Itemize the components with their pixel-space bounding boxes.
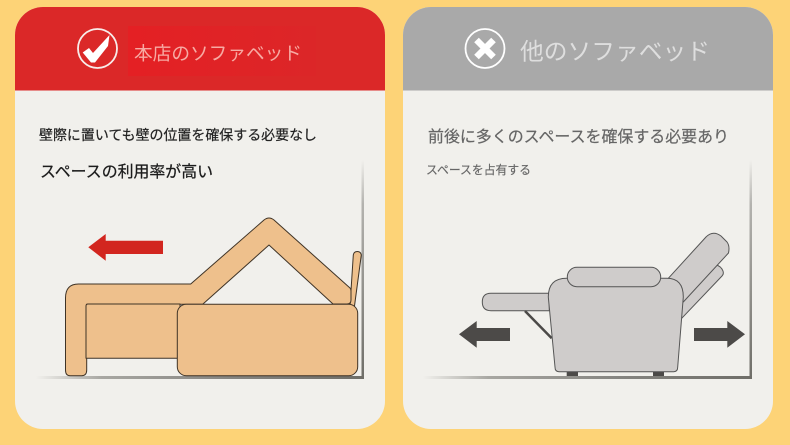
panel body	[15, 7, 385, 429]
heading: 本店のソファベッド	[134, 43, 302, 64]
under cushion	[86, 304, 180, 358]
illustration: sofa bed	[66, 218, 361, 376]
arm rest	[567, 267, 661, 287]
text: needs space front and back: 前後に多くのスペースを確保する必要あり	[428, 128, 729, 146]
body	[548, 278, 683, 372]
folding frame	[66, 218, 351, 376]
thin back rest	[350, 252, 361, 306]
left arrow	[459, 321, 510, 348]
icon: cross mark	[466, 29, 504, 68]
right arrow	[694, 321, 745, 348]
seat cushion	[177, 304, 358, 376]
wall and floor	[36, 160, 364, 379]
panel: other sofa beds	[403, 7, 773, 429]
red arrow	[88, 234, 163, 261]
text: no wall gap needed: 壁際に置いても壁の位置を確保する必要なし	[39, 127, 317, 143]
header band	[15, 7, 385, 90]
title highlight	[128, 26, 316, 76]
panel body	[403, 7, 773, 429]
strut	[525, 311, 552, 338]
legs	[567, 371, 664, 376]
foot rest	[482, 293, 549, 311]
illustration: recliner	[482, 233, 729, 376]
wall and floor	[423, 160, 752, 379]
icon: check mark	[78, 29, 117, 68]
text: space utilisation: スペースの利用率が高い	[40, 163, 213, 181]
panel: our sofa bed	[15, 7, 385, 429]
text: occupies space: スペースを占有する	[426, 163, 531, 177]
heading: 他のソファベッド	[520, 38, 710, 64]
header band	[403, 7, 773, 90]
front back rest	[668, 233, 729, 302]
rear back rest	[680, 265, 723, 318]
